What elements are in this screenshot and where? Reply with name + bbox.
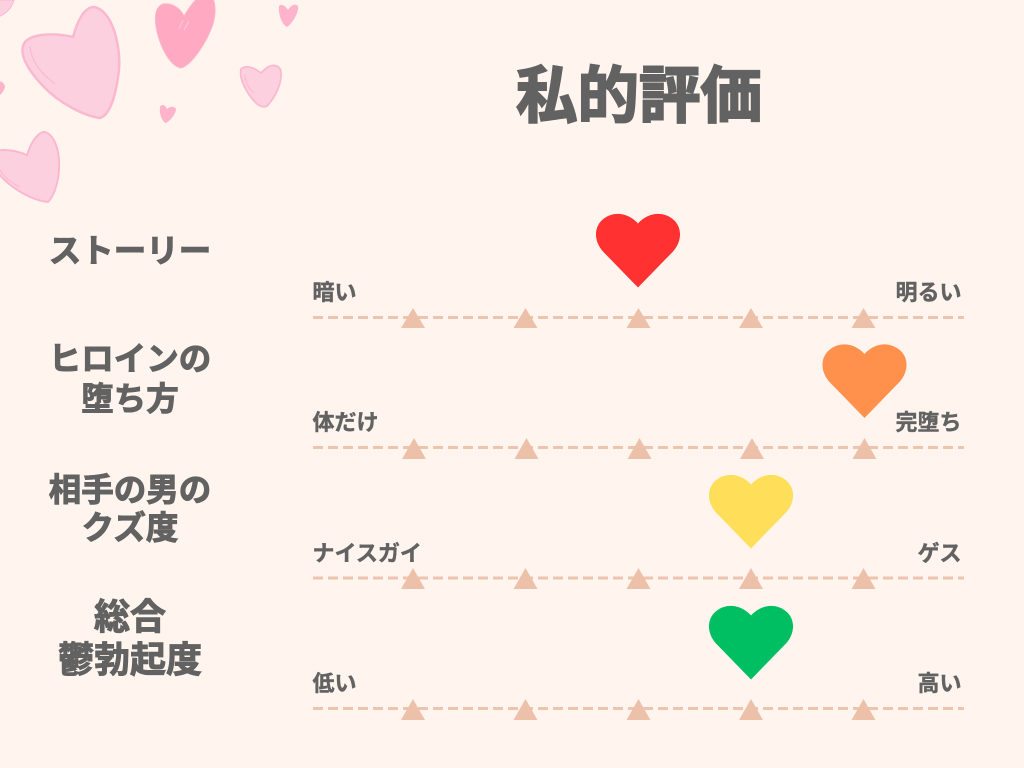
icon: lower left heart: [0, 132, 59, 202]
label: male partner: [48, 472, 211, 546]
row 3: male partner: [48, 472, 964, 589]
left label: dark: 暗い: [312, 280, 357, 304]
icon: top-left partial heart: [0, 0, 14, 17]
icon: left edge heart: [0, 81, 5, 96]
row 2: heroine's fall: [49, 341, 964, 459]
left label: low: 低い: [312, 670, 357, 696]
right label: high: 高い: [917, 670, 962, 696]
right label: scum: ゲス: [917, 540, 962, 566]
icon: tiny pink heart: [160, 105, 176, 123]
label: heroine's fall: 堕ち方: [81, 381, 179, 417]
label: heroine's fall: ヒロインの: [49, 341, 211, 377]
icon: medium pink heart: [241, 65, 281, 107]
decorative hearts: [0, 0, 298, 203]
right label: complete fall: 完堕ち: [895, 410, 962, 434]
label: heroine's fall: [49, 341, 211, 417]
row 1: story: [49, 214, 964, 328]
left label: body only: 体だけ: [312, 410, 379, 434]
left label: nice guy: ナイスガイ: [312, 540, 422, 566]
label: overall: 鬱勃起度: [58, 639, 202, 680]
label: overall: [58, 596, 202, 680]
icon: large pink heart: [22, 7, 119, 118]
label: story: ストーリー: [49, 233, 211, 269]
icon: deep pink heart: [155, 0, 215, 68]
title: 私的評価: [516, 62, 762, 131]
row 4: overall: [58, 596, 964, 720]
label: overall: 総合: [94, 596, 166, 637]
label: male partner: クズ度: [82, 510, 178, 546]
right label: bright: 明るい: [895, 280, 962, 304]
icon: small top-right heart: [279, 5, 298, 27]
label: male partner: 相手の男の: [49, 472, 211, 508]
